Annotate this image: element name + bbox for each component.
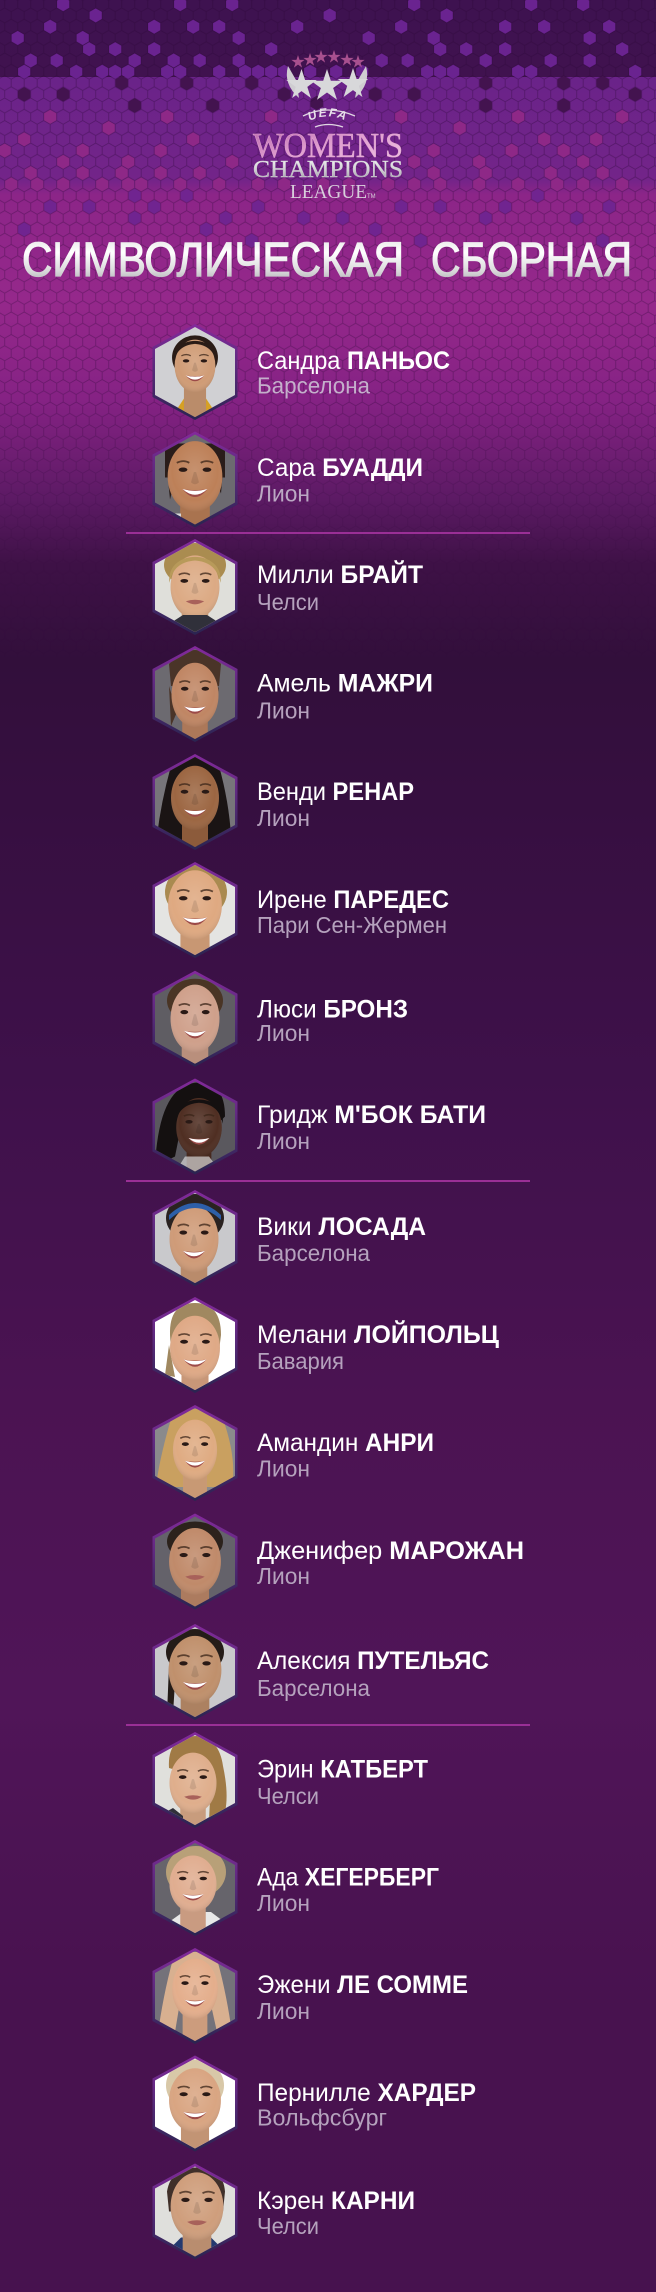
- logo text: WOMEN'S: WOMEN'S: [253, 126, 403, 165]
- club: Челси: [257, 2213, 319, 2239]
- name: Милли БРАЙТ: [257, 559, 423, 589]
- player: Ирене Паредес: [152, 862, 448, 958]
- player: Сара Буадди: [152, 432, 422, 528]
- name: Амель МАЖРИ: [257, 670, 433, 698]
- photo: [152, 1948, 238, 2054]
- player: Амель Мажри: [152, 646, 432, 742]
- club: Лион: [257, 1128, 310, 1154]
- trademark: TM: [367, 194, 376, 200]
- logo text: LEAGUE: LEAGUE: [290, 181, 367, 203]
- club: Лион: [257, 481, 310, 507]
- player: Милли Брайт: [152, 539, 423, 635]
- name: Гридж М'БОК БАТИ: [257, 1101, 486, 1129]
- club: Лион: [257, 697, 310, 723]
- photo: [152, 324, 238, 422]
- icon: crown of stars: [286, 50, 368, 100]
- name: Эрин КАТБЕРТ: [257, 1756, 428, 1784]
- name: Эжени ЛЕ СОММЕ: [257, 1971, 468, 1999]
- player: Ада Хегерберг: [152, 1840, 439, 1945]
- photo: [152, 432, 238, 528]
- photo: [152, 1732, 238, 1828]
- player: Амандин Анри: [152, 1405, 432, 1501]
- player: Вики Лосада: [152, 1190, 426, 1286]
- photo: [152, 862, 238, 958]
- player: Люси Бронз: [152, 970, 407, 1066]
- club: Барселона: [257, 1675, 370, 1701]
- name: Амандин АНРИ: [257, 1429, 434, 1457]
- name: Пернилле ХАРДЕР: [257, 2079, 476, 2107]
- photo: [152, 2164, 238, 2260]
- player: Алексия Путельяс: [152, 1624, 488, 1720]
- photo: [152, 1190, 238, 1286]
- name: Алексия ПУТЕЛЬЯС: [257, 1647, 489, 1675]
- name: Венди РЕНАР: [257, 778, 414, 806]
- photo: [152, 646, 238, 742]
- photo: [152, 1840, 238, 1945]
- club: Барселона: [257, 1240, 370, 1266]
- player: Дженифер Марожан: [152, 1514, 522, 1610]
- photo: [152, 539, 238, 635]
- player: Сандра Паньос: [152, 324, 450, 422]
- club: Лион: [257, 1020, 310, 1046]
- photo: [152, 1078, 238, 1174]
- background: [0, 0, 656, 1738]
- club: Лион: [257, 1998, 310, 2024]
- club: Вольфсбург: [257, 2105, 387, 2131]
- photo: [152, 1297, 238, 1393]
- name: Дженифер МАРОЖАН: [257, 1537, 524, 1565]
- player: Венди Ренар: [152, 754, 414, 850]
- name: Люси БРОНЗ: [257, 996, 408, 1024]
- UEFA wordmark: [302, 108, 356, 128]
- player: Пернилле Хардер: [152, 2056, 476, 2152]
- name: Кэрен КАРНИ: [257, 2187, 415, 2215]
- club: Лион: [257, 1890, 310, 1916]
- divider: midfielders / forwards: [126, 1724, 530, 1726]
- photo: [152, 1514, 238, 1610]
- name: Вики ЛОСАДА: [257, 1213, 426, 1241]
- club: Челси: [257, 1783, 319, 1809]
- club: Пари Сен-Жермен: [257, 912, 447, 938]
- player: Кэрен Карни: [152, 2164, 414, 2260]
- photo: [152, 1624, 238, 1720]
- name: Ада ХЕГЕРБЕРГ: [257, 1864, 439, 1892]
- club: Барселона: [257, 372, 370, 398]
- player: Мелани Лойпольц: [152, 1297, 499, 1393]
- logo: UEFA Women's Champions League: [252, 50, 403, 203]
- divider: goalkeepers / defenders: [126, 532, 530, 534]
- name: Сандра ПАНЬОС: [257, 347, 450, 375]
- photo: [152, 754, 238, 850]
- club: Челси: [257, 589, 319, 615]
- name: Мелани ЛОЙПОЛЬЦ: [257, 1319, 500, 1349]
- photo: [152, 1405, 238, 1501]
- club: Лион: [257, 1456, 310, 1482]
- club: Бавария: [257, 1348, 344, 1374]
- name: Ирене ПАРЕДЕС: [257, 886, 449, 914]
- player: Эрин Катберт: [152, 1732, 428, 1828]
- club: Лион: [257, 805, 310, 831]
- divider: defenders / midfielders: [126, 1180, 530, 1182]
- name: Сара БУАДДИ: [257, 454, 423, 482]
- title: СИМВОЛИЧЕСКАЯ: [22, 234, 404, 287]
- player: Эжени Ле Сомме: [152, 1948, 468, 2054]
- UEFA wordmark: UEFA: [308, 108, 346, 120]
- logo text: CHAMPIONS: CHAMPIONS: [253, 157, 403, 183]
- club: Лион: [257, 1563, 310, 1589]
- photo: [152, 2056, 238, 2152]
- player: Гридж М'Бок Бати: [152, 1078, 484, 1174]
- photo: [152, 970, 238, 1066]
